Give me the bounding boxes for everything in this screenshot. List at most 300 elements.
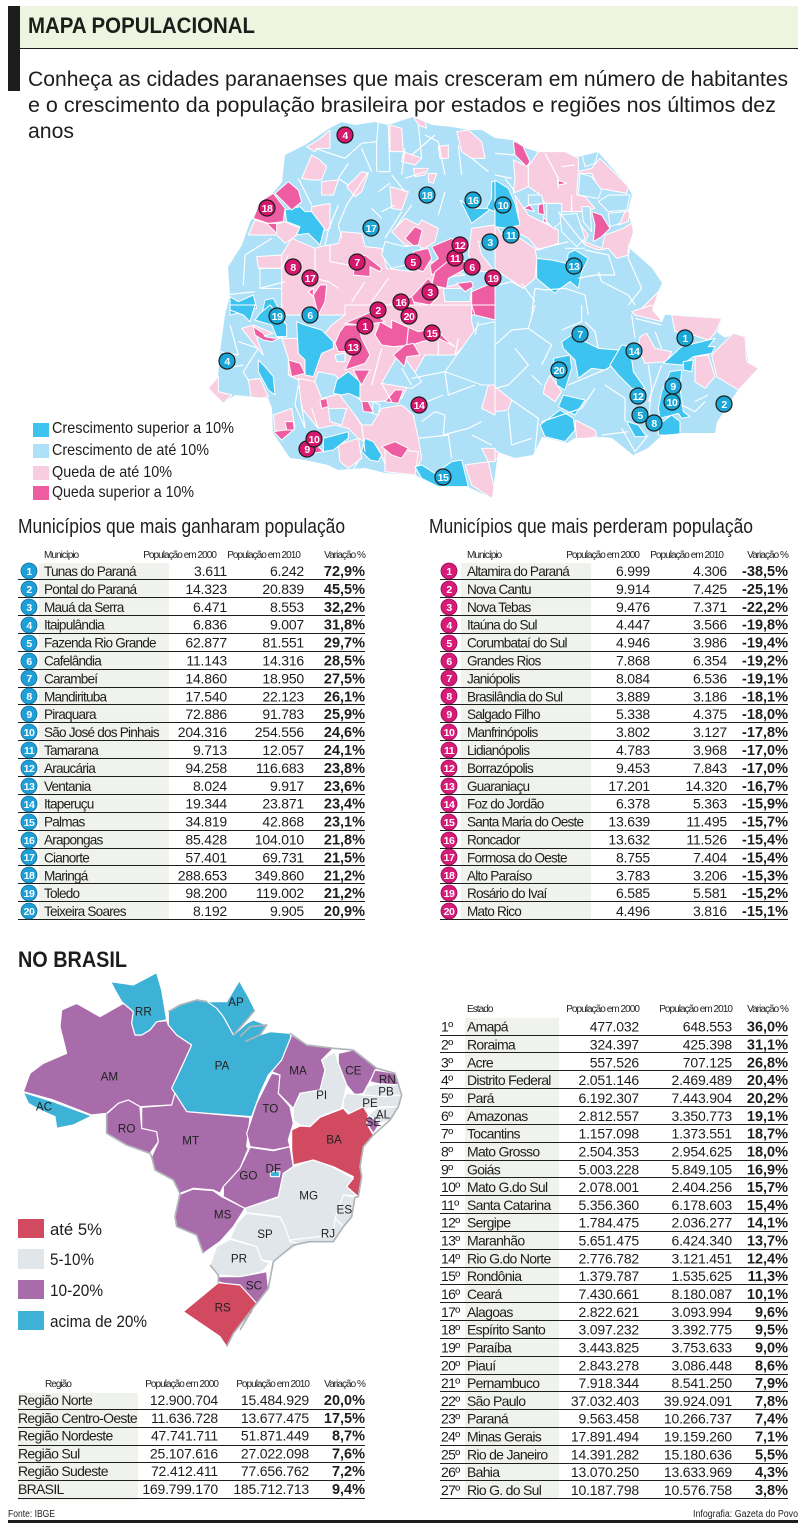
table: municipalities that lost population: 16 — [444, 835, 455, 847]
table: states: Rio G. do Sul — [467, 1482, 542, 1498]
legend: Brazil map: 5-10% — [50, 1250, 94, 1269]
map: Brazil states: MA — [289, 1065, 307, 1078]
table: states: 10,1% — [747, 1287, 788, 1303]
table: municipalities that lost population: -19,2% — [742, 654, 788, 670]
table: municipalities that lost population: -19,1% — [742, 671, 788, 687]
table: states: Roraima — [467, 1036, 516, 1052]
table: states: Bahia — [467, 1464, 500, 1480]
map: Brazil states: PB — [378, 1085, 394, 1098]
table: municipalities that gained population: 91.783 — [262, 706, 304, 722]
table: regions: 8,7% — [332, 1429, 365, 1445]
table: municipalities that gained population: Município — [44, 550, 80, 561]
table: municipalities that lost population: 9 — [446, 709, 452, 721]
table: states: Variação % — [747, 1004, 789, 1015]
map quadrant: southeast — [495, 305, 758, 460]
table: states: 8.180.087 — [672, 1286, 732, 1302]
table: states: 27º — [441, 1482, 460, 1498]
table: municipalities that gained population: 28,5% — [324, 654, 365, 670]
table: municipalities that gained population: 2 — [26, 584, 32, 596]
table: municipalities that gained population: 72,9% — [324, 564, 365, 580]
map: Brazil states: SE — [366, 1116, 381, 1129]
table: states: Sergipe — [467, 1215, 511, 1231]
markers: municipalities that gained population: 20 — [554, 365, 565, 377]
intro text: e o crescimento da população brasileira por estados e regiões nos últimos dez — [28, 94, 776, 117]
table: municipalities that lost population: 1 — [446, 566, 452, 578]
table: states: 1.157.098 — [579, 1126, 639, 1142]
map quadrant: northeast — [495, 142, 658, 315]
table: states: 7.430.661 — [579, 1286, 639, 1302]
markers: municipalities that gained population: 11 — [506, 230, 517, 242]
table: municipalities that lost population: 8 — [446, 691, 452, 703]
table: states: População em 2010 — [659, 1004, 733, 1015]
table: municipalities that gained population: 21,5% — [324, 850, 365, 866]
table: municipalities that lost population: -15,4% — [742, 850, 788, 866]
table: municipalities that gained population: 19 — [24, 888, 35, 900]
table: states: 14,1% — [747, 1216, 788, 1232]
table: municipalities that lost population: -17,8% — [742, 725, 788, 741]
title: MAPA POPULACIONAL — [28, 13, 255, 38]
table: municipalities that lost population: 5.581 — [693, 885, 727, 901]
legend: Paraná map: Crescimento de até 10% — [52, 442, 209, 459]
table: states: Amazonas — [467, 1108, 528, 1124]
table: states: 13º — [441, 1232, 460, 1248]
table: municipalities that lost population: 13.632 — [608, 832, 650, 848]
map: Brazil states: TO — [262, 1102, 278, 1115]
table: states: 16,9% — [747, 1162, 788, 1178]
table: municipalities that lost population: Rosário do Ivaí — [467, 886, 547, 901]
markers: municipalities that lost population: 17 — [305, 273, 316, 285]
table: municipalities that gained population: 11.143 — [186, 652, 227, 668]
table: municipalities that lost population: 3.968 — [693, 742, 727, 758]
table: municipalities that lost population: Formosa do Oeste — [467, 850, 567, 865]
footer bar — [8, 1520, 798, 1523]
map: Brazil states — [23, 973, 402, 1347]
table: states: 707.125 — [683, 1054, 732, 1070]
table: regions: Variação % — [324, 1379, 366, 1390]
table: municipalities that lost population: 6.999 — [616, 563, 650, 579]
table: municipalities that lost population: -25,1% — [742, 582, 788, 598]
table: municipalities that lost population: Roncador — [467, 832, 521, 848]
table: regions: 47.741.711 — [151, 1428, 218, 1444]
table: municipalities that lost population: 14 — [444, 799, 455, 811]
table: municipalities that gained population: 349.860 — [255, 867, 304, 883]
table: municipalities that gained population: 98.200 — [185, 885, 227, 901]
markers: municipalities that lost population: 20 — [404, 311, 415, 323]
table: municipalities that gained population: 15 — [24, 817, 35, 829]
table: states: 16º — [441, 1286, 460, 1302]
table: municipalities that lost population: 6.378 — [616, 796, 650, 812]
table: states: 7,9% — [755, 1376, 788, 1392]
legend: Brazil map: até 5% — [50, 1220, 102, 1239]
table: regions: 12.900.704 — [150, 1392, 218, 1408]
table: states: 1.379.787 — [579, 1268, 639, 1284]
markers: municipalities that lost population: 10 — [309, 434, 320, 446]
table: municipalities that gained population — [18, 550, 366, 920]
table: municipalities that gained population: 57.401 — [185, 849, 227, 865]
table: regions: 17,5% — [324, 1411, 365, 1427]
markers: municipalities that gained population: 19 — [272, 311, 283, 323]
table: municipalities that gained population: Arapongas — [44, 832, 104, 848]
table: municipalities that lost population: 4.783 — [616, 742, 650, 758]
table: municipalities that lost population: Alto Paraíso — [467, 868, 532, 883]
table: municipalities that lost population: 6 — [446, 656, 452, 668]
table: municipalities that gained population: 204.316 — [178, 724, 227, 740]
table: municipalities that gained population: 20.839 — [262, 581, 304, 597]
table: regions: 77.656.762 — [241, 1463, 309, 1479]
table: regions: Região Sudeste — [18, 1463, 109, 1479]
table: municipalities that lost population: 9.453 — [616, 760, 650, 776]
table: municipalities that lost population: -15,1% — [742, 904, 788, 920]
table: municipalities that lost population: 6.585 — [616, 885, 650, 901]
table: states: 7.918.344 — [579, 1375, 639, 1391]
table: states: 2.036.277 — [672, 1215, 732, 1231]
markers: municipalities that lost population: 14 — [414, 400, 425, 412]
table: municipalities that lost population: 11.526 — [686, 832, 727, 848]
table: states: 12,4% — [747, 1251, 788, 1267]
table: municipalities that gained population: São José dos Pinhais — [44, 725, 160, 740]
markers: municipalities that gained population: 17 — [366, 223, 377, 235]
table: states: 5.651.475 — [579, 1232, 639, 1248]
table: states: Paraíba — [467, 1340, 512, 1356]
table: municipalities that lost population: Guaraniaçu — [467, 779, 530, 794]
table: municipalities that lost population: 3.802 — [616, 724, 650, 740]
table: states: 9,0% — [755, 1340, 788, 1356]
table: municipalities that lost population: -19,4% — [742, 636, 788, 652]
table: municipalities that gained population: 6.836 — [193, 617, 227, 633]
table: states: Rio de Janeiro — [467, 1446, 548, 1462]
table: municipalities that gained population: Tunas do Paraná — [44, 564, 137, 579]
table: regions: 20,0% — [324, 1393, 365, 1409]
table: states: Ceará — [467, 1286, 503, 1302]
markers: municipalities that gained population: 1 — [682, 333, 688, 345]
table: regions: 169.799.170 — [142, 1481, 218, 1497]
table: states: 10º — [441, 1179, 460, 1195]
table: municipalities that lost population: 17.201 — [608, 778, 650, 794]
table: states: 19.159.260 — [664, 1429, 732, 1445]
table: municipalities that gained population: 9 — [26, 709, 32, 721]
markers: municipalities that lost population: 1 — [362, 321, 368, 333]
table: municipalities that lost population: 3.816 — [693, 903, 727, 919]
map: Brazil states: AM — [101, 1070, 118, 1083]
table: states: 12º — [441, 1215, 460, 1231]
legend: Brazil map — [18, 1219, 147, 1331]
table: states: 3.121.451 — [672, 1250, 732, 1266]
table: states: Goiás — [467, 1161, 501, 1177]
table: municipalities that lost population: Grandes Rios — [467, 654, 542, 668]
table: states: 6.192.307 — [579, 1090, 639, 1106]
map: Paraná municipalities — [200, 110, 770, 505]
map: Brazil states: MS — [214, 1208, 232, 1221]
table: states: 13.633.969 — [664, 1464, 732, 1480]
table: states: 26º — [441, 1464, 460, 1480]
table: regions: 7,2% — [332, 1464, 365, 1480]
table: municipalities that lost population: 7 — [446, 673, 452, 685]
table: municipalities that gained population: Pontal do Paraná — [44, 582, 137, 597]
map: Brazil states: ES — [337, 1203, 352, 1216]
markers: municipalities that gained population: 16 — [468, 195, 479, 207]
table: municipalities that gained population: 288.653 — [178, 867, 227, 883]
table: municipalities that gained population: Cafelândia — [44, 654, 102, 668]
table: states: 21º — [441, 1375, 460, 1391]
table: municipalities that gained population: 72.886 — [185, 706, 227, 722]
table: states: 6.424.340 — [672, 1232, 732, 1248]
table: states: Paraná — [467, 1411, 509, 1427]
table: states: 9º — [441, 1161, 453, 1177]
table: municipalities that lost population: Foz do Jordão — [467, 797, 544, 812]
table: regions: 72.412.411 — [151, 1463, 218, 1479]
table: states: 2.078.001 — [579, 1179, 639, 1195]
table: states: 10.187.798 — [571, 1482, 639, 1498]
table: municipalities that lost population: 11 — [444, 745, 455, 757]
table: municipalities that gained population: 8.192 — [193, 903, 227, 919]
table: municipalities that gained population: 85.428 — [185, 832, 227, 848]
source credit: Fonte: IBGE — [8, 1509, 55, 1520]
table: municipalities that lost population: Itaúna do Sul — [467, 618, 537, 633]
markers: municipalities that gained population — [219, 187, 732, 485]
table: municipalities that gained population: 6.471 — [193, 599, 227, 615]
table: municipalities that lost population: Janiópolis — [467, 671, 520, 686]
markers: municipalities that lost population: 13 — [348, 342, 359, 354]
map: Brazil states: GO — [239, 1169, 257, 1182]
map: Brazil states: RS — [215, 1301, 231, 1314]
table: states: 324.397 — [590, 1036, 639, 1052]
table: municipalities that gained population: 13 — [24, 781, 35, 793]
table: states: 3º — [441, 1054, 453, 1070]
table: states: 557.526 — [590, 1054, 639, 1070]
table: municipalities that lost population: 3.986 — [693, 635, 727, 651]
markers: municipalities that gained population: 6 — [307, 310, 313, 322]
table: municipalities that lost population: 8.755 — [616, 849, 650, 865]
table: states: 14.391.282 — [571, 1446, 639, 1462]
table: municipalities that gained population: 8.553 — [270, 599, 304, 615]
table: municipalities that lost population: -15,3% — [742, 868, 788, 884]
markers: municipalities that gained population: 10 — [498, 200, 509, 212]
table: states: 4º — [441, 1072, 453, 1088]
table: states: 1.784.475 — [579, 1215, 639, 1231]
table: municipalities that gained population: Palmas — [44, 815, 86, 830]
table: municipalities that gained population: 14.860 — [185, 670, 227, 686]
table: states: Santa Catarina — [467, 1197, 552, 1213]
table: municipalities that lost population: 2 — [446, 584, 452, 596]
table: municipalities that lost population: 3.206 — [693, 867, 727, 883]
table: municipalities that lost population: -16,7% — [742, 779, 788, 795]
table: municipalities that lost population: 12 — [444, 763, 455, 775]
table: states: 2.954.625 — [672, 1143, 732, 1159]
markers: municipalities that lost population: 8 — [290, 262, 296, 274]
table: municipalities that gained population: 14.316 — [262, 652, 304, 668]
table: municipalities that gained population: 3.611 — [194, 563, 227, 579]
table: municipalities that gained population: 24,1% — [324, 743, 365, 759]
table: municipalities that lost population: 7.868 — [616, 652, 650, 668]
table: municipalities that lost population: 14.320 — [685, 778, 727, 794]
table: states: População em 2000 — [566, 1004, 640, 1015]
table: regions: 15.484.929 — [241, 1392, 309, 1408]
table: municipalities that gained population: 31,8% — [324, 618, 365, 634]
table: regions: 27.022.098 — [241, 1445, 309, 1461]
table: municipalities that gained population: Itaperuçu — [44, 797, 94, 812]
table: states: Maranhão — [467, 1232, 525, 1248]
table: states: 1º — [441, 1019, 453, 1035]
table: municipalities that lost population: -15,2% — [742, 886, 788, 902]
markers: municipalities that lost population: 3 — [427, 287, 433, 299]
table: municipalities that gained population: 32,2% — [324, 600, 365, 616]
table: municipalities that lost population: -18,1% — [742, 689, 788, 705]
table: states: 1.373.551 — [672, 1126, 732, 1142]
table: municipalities that gained population: 9.007 — [270, 617, 304, 633]
table: states: 3.097.232 — [579, 1322, 639, 1338]
table: states: 5.003.228 — [579, 1161, 639, 1177]
table: municipalities that lost population: Variação % — [747, 550, 789, 561]
table: municipalities that gained population: 25,9% — [324, 707, 365, 723]
map: Brazil states: PE — [362, 1097, 378, 1110]
table: states: 7.443.904 — [672, 1090, 732, 1106]
table: states: 3.443.825 — [579, 1340, 639, 1356]
map: Brazil states: AC — [36, 1100, 52, 1113]
map: Brazil states: PA — [215, 1059, 230, 1072]
markers: municipalities that lost population: 15 — [427, 328, 438, 340]
table: municipalities that gained population: 10 — [24, 727, 35, 739]
table: regions: Região Nordeste — [18, 1428, 113, 1444]
table: states: 19º — [441, 1340, 460, 1356]
table: municipalities that lost population: 5.363 — [693, 796, 727, 812]
table: states: Amapá — [467, 1019, 509, 1035]
table: municipalities that lost population: 15 — [444, 817, 455, 829]
table: regions: 7,6% — [332, 1446, 365, 1462]
table: municipalities that gained population: 23.871 — [262, 796, 304, 812]
table: regions: 25.107.616 — [150, 1445, 218, 1461]
table: states: 23º — [441, 1411, 460, 1427]
table: municipalities that gained population: 14 — [24, 799, 35, 811]
markers: municipalities that gained population: 7 — [577, 329, 583, 341]
table: municipalities that gained population: 6 — [26, 656, 32, 668]
table: states: 648.553 — [683, 1019, 732, 1035]
table: states: 3.392.775 — [672, 1322, 732, 1338]
table: states: 11º — [441, 1197, 459, 1213]
table: regions: População em 2010 — [236, 1379, 310, 1390]
table: states: 9,5% — [755, 1323, 788, 1339]
map: Brazil states: PR — [231, 1252, 247, 1265]
table: municipalities that lost population: 4.375 — [693, 706, 727, 722]
table: municipalities that gained population: Teixeira Soares — [44, 904, 127, 919]
table: municipalities that lost population: 7.371 — [693, 599, 727, 615]
markers: municipalities that lost population: 4 — [342, 130, 348, 142]
markers: municipalities that lost population — [259, 127, 501, 457]
table: municipalities that lost population: 3.127 — [693, 724, 727, 740]
table: states: 5.849.105 — [672, 1161, 732, 1177]
table: municipalities that gained population: 23,1% — [324, 815, 365, 831]
table: municipalities that lost population: 20 — [444, 906, 455, 918]
table: municipalities that lost population: 3 — [446, 602, 452, 614]
table: municipalities that gained population: Cianorte — [44, 850, 89, 865]
intro text: Conheça as cidades paranaenses que mais cresceram em número de habitantes — [28, 68, 788, 91]
markers: municipalities that gained population: 14 — [629, 346, 640, 358]
table: municipalities that gained population: Toledo — [44, 886, 79, 901]
table: municipalities that gained population: 21,8% — [324, 832, 365, 848]
table: states: Pará — [467, 1090, 495, 1106]
table: states: 2.051.146 — [579, 1072, 639, 1088]
table: municipalities that lost population: 7.404 — [693, 849, 727, 865]
table: municipalities that gained population: 94.258 — [185, 760, 227, 776]
markers: municipalities that gained population: 9 — [670, 381, 676, 393]
table: municipalities that gained population: 19.344 — [185, 796, 227, 812]
table: municipalities that gained population: Araucária — [44, 761, 96, 776]
map: Brazil states: DF — [266, 1162, 281, 1175]
table: states: 11,3% — [748, 1269, 788, 1285]
table: municipalities that lost population: 4 — [446, 620, 452, 632]
map quadrant: northwest — [225, 117, 495, 315]
table: municipalities that gained population: 23,4% — [324, 797, 365, 813]
table: states: 6.178.603 — [672, 1197, 732, 1213]
map: Brazil states: RJ — [321, 1227, 335, 1240]
markers: municipalities that lost population: 7 — [354, 257, 360, 269]
table: states: Estado — [467, 1004, 494, 1015]
markers: municipalities that lost population: 9 — [304, 444, 310, 456]
markers: municipalities that lost population: 2 — [375, 305, 381, 317]
markers: municipalities that lost population: 5 — [410, 257, 416, 269]
table: municipalities that gained population: 16 — [24, 835, 35, 847]
table: regions: 13.677.475 — [241, 1410, 309, 1426]
table: municipalities that lost population: Altamira do Paraná — [467, 564, 570, 579]
table: states: 15.180.636 — [664, 1446, 732, 1462]
map: Brazil states: AL — [376, 1108, 391, 1121]
markers: municipalities that gained population: 5 — [637, 410, 643, 422]
table: municipalities that lost population: 3.186 — [693, 688, 727, 704]
table: states: 1.535.625 — [672, 1268, 732, 1284]
table: municipalities that gained population: 116.683 — [256, 760, 304, 776]
table: municipalities that lost population: 7.425 — [693, 581, 727, 597]
table: municipalities that gained population: 20,9% — [324, 904, 365, 920]
legend: Paraná map: Queda de até 10% — [52, 464, 172, 481]
table: states: 39.924.091 — [664, 1393, 732, 1409]
markers: municipalities that gained population: 10 — [667, 397, 678, 409]
table: municipalities that gained population: População em 2000 — [143, 550, 217, 561]
table: states: 9.563.458 — [579, 1411, 639, 1427]
table: municipalities that gained population: 21,2% — [324, 886, 365, 902]
table: states: 8,6% — [755, 1358, 788, 1374]
map quadrant: southwest — [208, 305, 495, 498]
legend: Brazil map: 10-20% — [50, 1281, 103, 1300]
table: municipalities that lost population: 6.354 — [693, 652, 727, 668]
table: regions: Região Sul — [18, 1445, 80, 1461]
table: states: 22º — [441, 1393, 460, 1409]
table: states: 425.398 — [683, 1036, 732, 1052]
table: regions: Região — [45, 1379, 72, 1390]
legend: Brazil map: acima de 20% — [50, 1312, 147, 1331]
table: municipalities that gained population: 17.540 — [185, 688, 227, 704]
table: municipalities that lost population: Corumbataí do Sul — [467, 636, 568, 651]
table: states: 3,8% — [755, 1483, 788, 1499]
table: municipalities that lost population: Borrazópolis — [467, 761, 534, 776]
table: states: 15,4% — [747, 1198, 788, 1214]
table: states: 10.576.758 — [664, 1482, 732, 1498]
map: Brazil states: RO — [118, 1122, 135, 1135]
table: municipalities that lost population: 17 — [444, 852, 455, 864]
table: states: 17.891.494 — [571, 1429, 639, 1445]
table: states: 2º — [441, 1036, 453, 1052]
table: municipalities that lost population: 13.639 — [608, 814, 650, 830]
table: states: 15,7% — [747, 1180, 788, 1196]
heading: no Brasil: NO BRASIL — [18, 947, 127, 972]
table: states: 3.350.773 — [672, 1108, 732, 1124]
table: municipalities that gained population: 18.950 — [262, 670, 304, 686]
table: states: Minas Gerais — [467, 1429, 542, 1445]
table: states: 10.266.737 — [664, 1411, 732, 1427]
map: Brazil states: PI — [316, 1089, 327, 1102]
map: Brazil states: SC — [246, 1279, 262, 1292]
table: regions: Região Centro-Oeste — [18, 1410, 138, 1426]
table: municipalities that lost population: -17,0% — [742, 743, 788, 759]
map: Brazil states: RN — [379, 1073, 396, 1086]
